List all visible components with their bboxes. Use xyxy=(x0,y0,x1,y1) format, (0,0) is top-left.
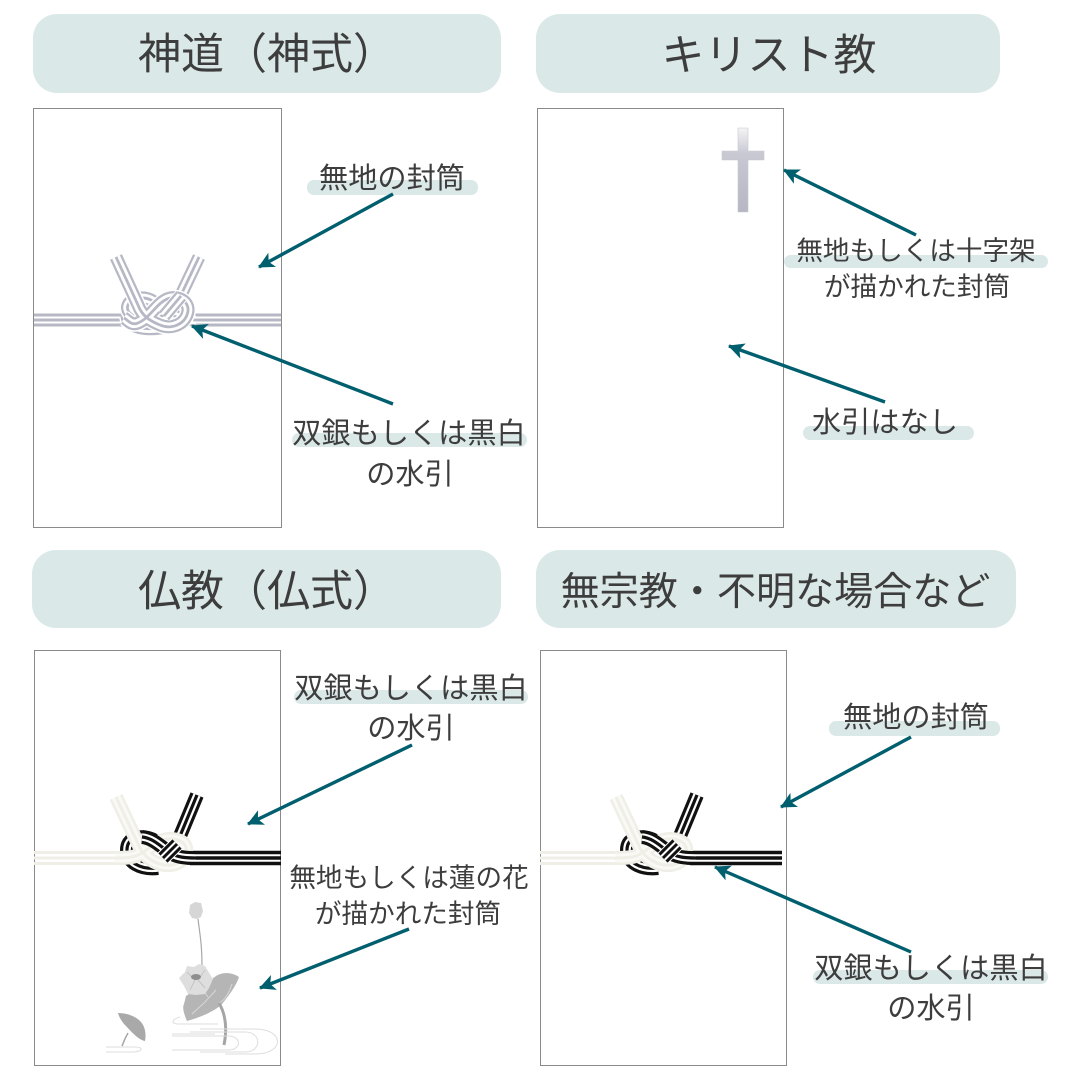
callout: silver or black and white mizuhiki: 双銀もしくは黒白 xyxy=(292,417,526,450)
arrow: to mizuhiki xyxy=(192,326,393,404)
arrow: to lotus xyxy=(260,929,409,988)
envelope: Shinto plain envelope xyxy=(34,108,282,528)
heading pill: Buddhism xyxy=(32,550,501,628)
callout: plain or lotus envelope xyxy=(289,863,529,929)
illustration: lotus flower xyxy=(106,902,278,1054)
envelope: plain envelope xyxy=(540,650,786,1066)
arrow: to mizuhiki xyxy=(715,867,911,952)
arrow: to envelope centre xyxy=(729,346,885,402)
arrow: to envelope xyxy=(259,194,393,267)
panel: Shinto xyxy=(33,14,527,528)
callout: silver or black and white mizuhiki xyxy=(292,417,527,491)
callout: silver or black and white mizuhiki: の水引 xyxy=(367,712,455,745)
arrow: to mizuhiki xyxy=(248,745,412,824)
envelope: Christian envelope xyxy=(538,108,784,528)
heading pill: no religion or unknown: 無宗教・不明な場合など xyxy=(561,571,990,614)
icon: silver mizuhiki knot xyxy=(34,257,281,329)
callout: plain envelope: 無地の封筒 xyxy=(319,162,465,195)
callout: silver or black and white mizuhiki: の水引 xyxy=(366,458,454,491)
callout: silver or black and white mizuhiki: の水引 xyxy=(887,992,975,1025)
heading pill: Christianity: キリスト教 xyxy=(662,32,876,80)
envelope: Buddhist envelope xyxy=(34,650,280,1066)
icon: cross xyxy=(722,128,764,212)
callout: plain or cross envelope: 無地もしくは十字架 xyxy=(796,236,1036,266)
heading pill: Christianity xyxy=(536,14,1000,93)
callout: silver or black and white mizuhiki: 双銀もしくは黒白 xyxy=(294,672,528,705)
heading pill: no religion or unknown xyxy=(536,550,1016,628)
callout: silver or black and white mizuhiki: 双銀もしくは黒白 xyxy=(814,952,1048,985)
heading pill: Buddhism: 仏教（仏式） xyxy=(138,568,396,616)
panel: no religion or unknown xyxy=(536,550,1048,1066)
callout: plain or lotus envelope: が描かれた封筒 xyxy=(315,899,501,929)
callout: silver or black and white mizuhiki xyxy=(813,952,1048,1025)
arrow: to cross xyxy=(784,170,916,235)
callout: plain or lotus envelope: 無地もしくは蓮の花 xyxy=(289,863,529,893)
heading pill: Shinto: 神道（神式） xyxy=(138,31,396,79)
arrow: to envelope xyxy=(781,737,911,807)
callout: plain or cross envelope: が描かれた封筒 xyxy=(824,272,1010,302)
panel: Buddhism xyxy=(32,550,529,1066)
callout: plain envelope: 無地の封筒 xyxy=(843,701,989,734)
icon: black and white mizuhiki knot xyxy=(540,795,782,868)
callout: no mizuhiki: 水引はなし xyxy=(812,406,958,439)
callout: silver or black and white mizuhiki xyxy=(294,672,528,745)
icon: black and white mizuhiki knot xyxy=(34,795,281,868)
panel: Christianity xyxy=(536,14,1048,528)
callout: plain or cross envelope xyxy=(784,236,1048,302)
heading pill: Shinto xyxy=(33,14,501,93)
